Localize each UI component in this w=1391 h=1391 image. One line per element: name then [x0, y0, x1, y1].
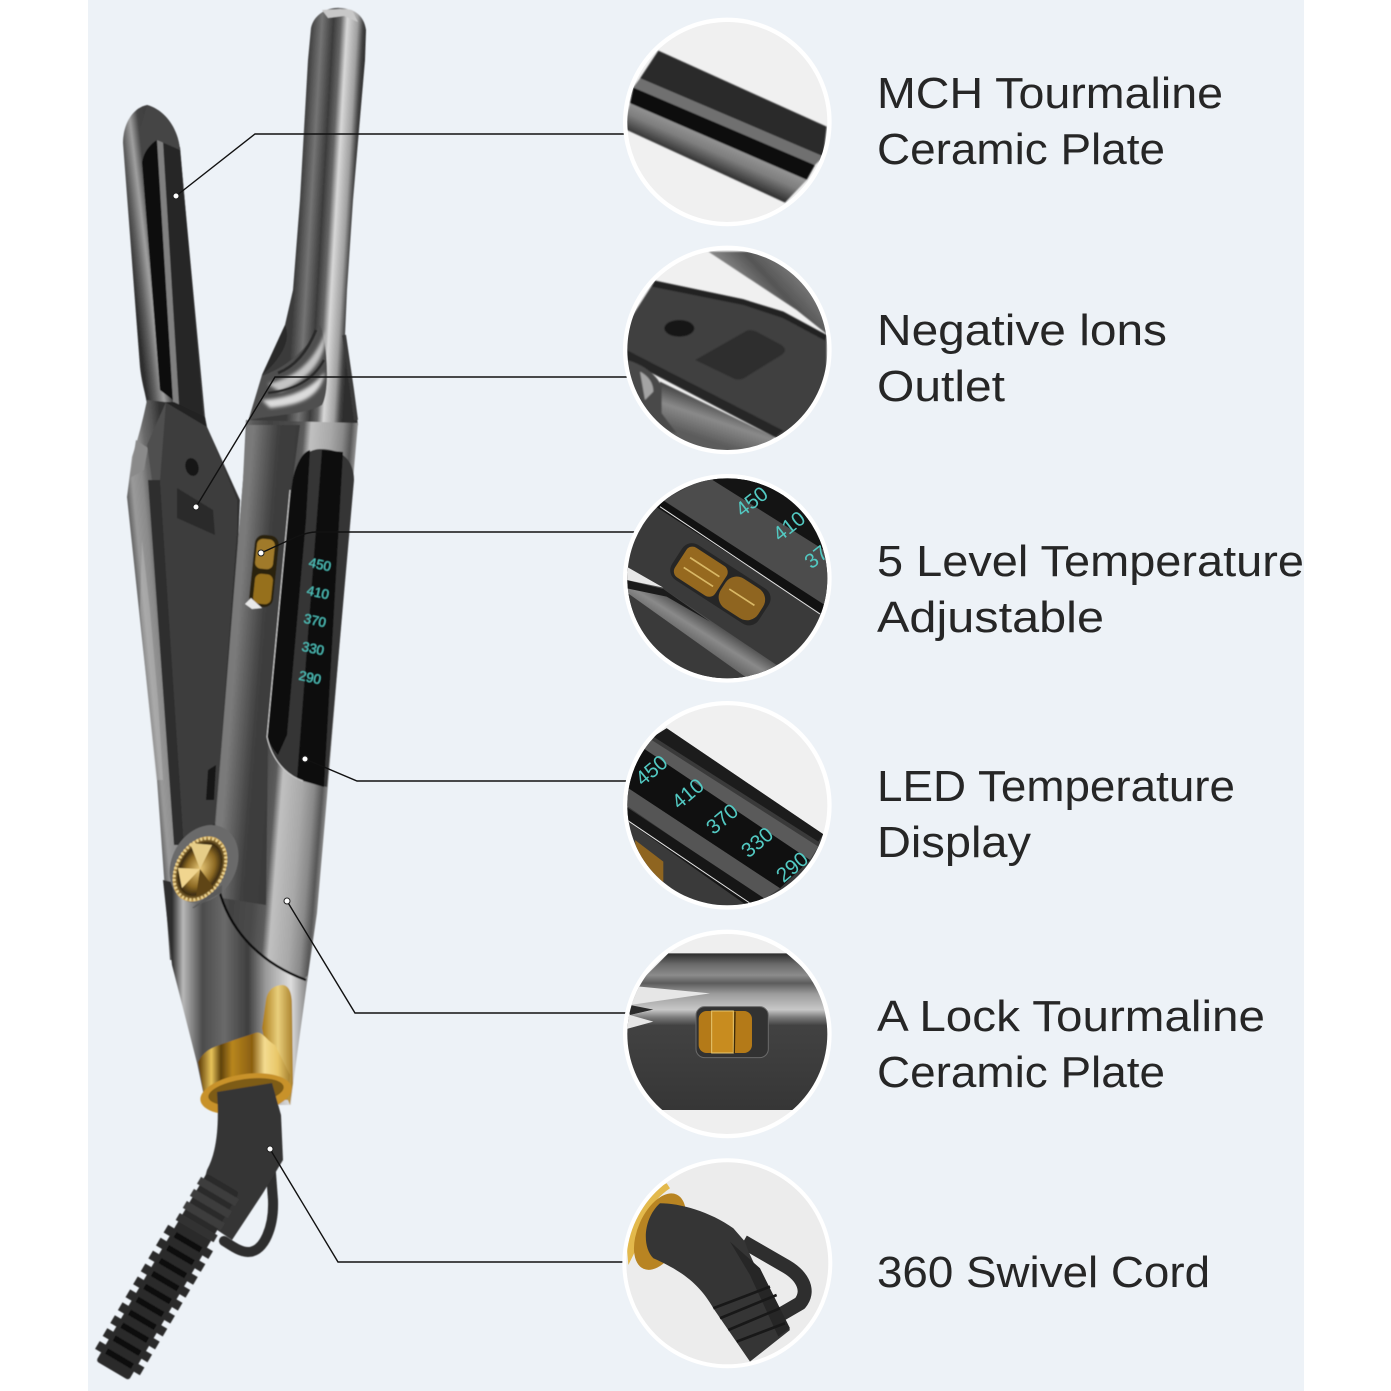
lock button — [696, 1007, 768, 1058]
temperature numbers: 450 — [307, 555, 333, 574]
strain relief ribs — [90, 1170, 245, 1384]
gold temperature buttons — [245, 534, 280, 609]
detail circle: ceramic plate — [623, 18, 832, 226]
label: LED Temperature Display — [877, 762, 1235, 867]
temperature numbers — [297, 555, 333, 687]
temperature numbers: 290 — [297, 668, 323, 687]
upper arm tip — [246, 8, 366, 428]
detail circle: ions outlet — [623, 246, 832, 454]
detail circle: LED display: 370 — [702, 799, 743, 839]
label: LED Temperature Display: Display — [877, 818, 1031, 867]
cord loop — [224, 1160, 273, 1252]
pivot gold disc — [156, 812, 252, 916]
label: MCH Tourmaline Ceramic Plate: Ceramic Plate — [877, 125, 1165, 174]
label: A Lock Tourmaline Ceramic Plate — [877, 992, 1265, 1097]
detail circle: temperature buttons: 410 — [769, 507, 810, 546]
detail circle: LED display — [623, 701, 832, 910]
label: MCH Tourmaline Ceramic Plate — [877, 69, 1223, 174]
detail circle: temperature buttons — [623, 474, 832, 682]
inner dark strip of upper arm — [216, 425, 300, 905]
detail circle: LED display: 410 — [668, 774, 709, 814]
temperature numbers: 410 — [305, 583, 331, 602]
label: 5 Level Temperature Adjustable: Adjustable — [877, 593, 1104, 642]
label: 5 Level Temperature Adjustable — [877, 537, 1304, 642]
label: Negative Ions Outlet: Negative lons — [877, 306, 1167, 355]
gold buttons — [670, 543, 770, 626]
callout line: MCH plate — [173, 134, 625, 199]
ion outlet diamond — [177, 488, 215, 535]
ion outlet hole — [183, 457, 201, 477]
detail circle: temperature buttons: 450 — [731, 482, 773, 522]
swivel cord — [90, 1083, 283, 1384]
label: Negative Ions Outlet — [877, 306, 1167, 411]
detail circle: lock switch — [623, 930, 832, 1138]
detail circle: LED display: 290 — [772, 847, 813, 887]
label: Negative Ions Outlet: Outlet — [877, 362, 1005, 411]
LED display window — [267, 449, 354, 787]
lower arm shell — [127, 400, 240, 960]
lower arm tip with ceramic plate — [123, 105, 206, 428]
label: A Lock Tourmaline Ceramic Plate: Ceramic Plate — [877, 1048, 1165, 1097]
swivel body — [195, 1083, 283, 1240]
callout line: temperature buttons — [258, 532, 636, 556]
loop — [743, 1242, 805, 1315]
body — [646, 1203, 790, 1362]
detail circle: LED display: 330 — [737, 823, 778, 863]
callout line: negative ions outlet — [193, 377, 627, 510]
upper arm body — [215, 325, 358, 1000]
callout line: swivel cord — [267, 1146, 625, 1262]
temperature numbers: 370 — [302, 611, 328, 630]
detail circle: LED display: 450 — [631, 751, 672, 791]
gold collar — [198, 985, 294, 1120]
label: 5 Level Temperature Adjustable: 5 Level Temperature — [877, 537, 1304, 586]
detail circle: swivel cord — [622, 1158, 832, 1368]
callout line: lock — [284, 898, 627, 1013]
label: 360 Swivel Cord: 360 Swivel Cord — [877, 1248, 1210, 1297]
temperature numbers: 330 — [300, 639, 326, 658]
callout line: LED display — [302, 756, 627, 781]
label: MCH Tourmaline Ceramic Plate: MCH Tourmaline — [877, 69, 1223, 118]
hair straightener product image — [90, 8, 366, 1384]
label: LED Temperature Display: LED Temperature — [877, 762, 1235, 811]
detail circle: temperature buttons: 370 — [800, 534, 842, 574]
label: A Lock Tourmaline Ceramic Plate: A Lock Tourmaline — [877, 992, 1265, 1041]
handle — [163, 880, 308, 1105]
